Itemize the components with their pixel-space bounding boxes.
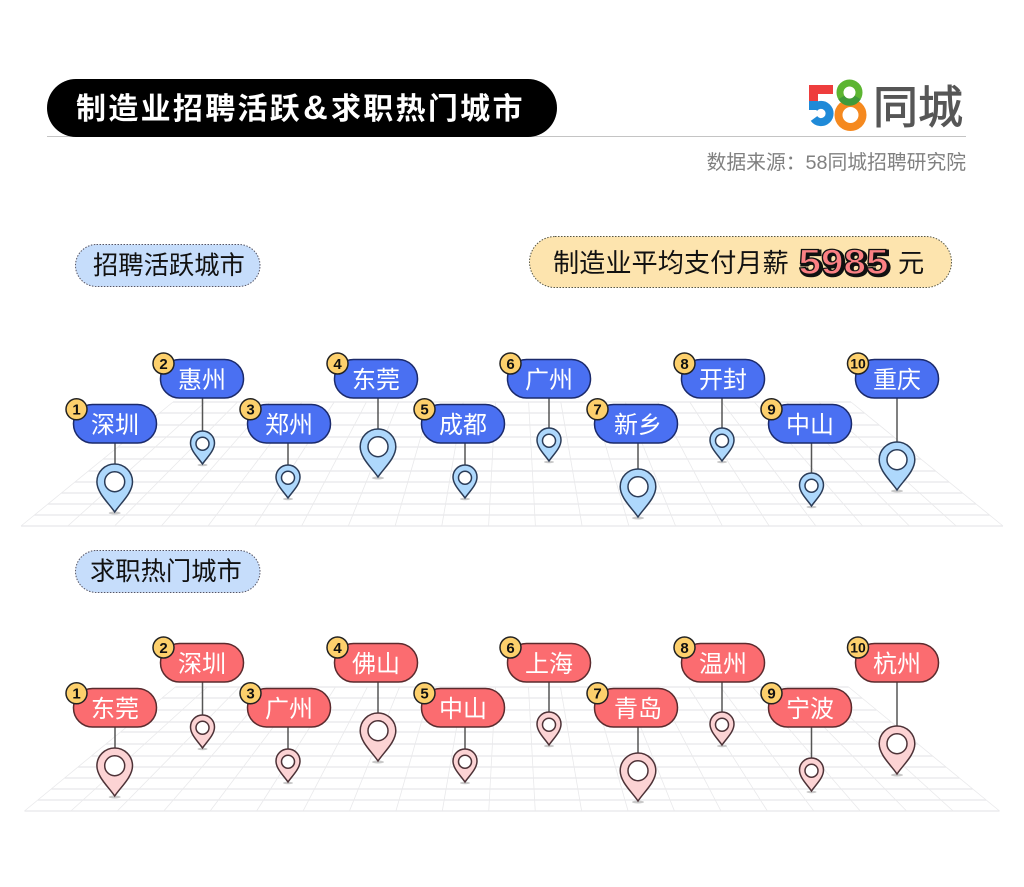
seeker city 10: 杭州: 10 xyxy=(850,640,866,656)
seeker city 10: 杭州 xyxy=(848,637,938,776)
seeker city 6: 上海 xyxy=(500,637,590,747)
title banner xyxy=(47,79,557,137)
hiring city 10: 重庆: 重庆 xyxy=(873,367,921,394)
salary callout: 元 xyxy=(898,248,924,278)
seeker city 9: 宁波: 9 xyxy=(767,686,776,702)
seeker city 2: 深圳 xyxy=(153,637,244,750)
hiring city 3: 郑州: 郑州 xyxy=(265,412,313,439)
seeker city 8: 温州: 温州 xyxy=(699,651,747,678)
hiring city 5: 成都: 5 xyxy=(420,402,429,418)
hiring city 1: 深圳: 1 xyxy=(72,402,81,418)
seeker city 2: 深圳: 深圳 xyxy=(178,651,226,678)
hiring city 4: 东莞 xyxy=(327,353,418,480)
hiring city 10: 重庆: 10 xyxy=(850,356,866,372)
salary callout: 5985 xyxy=(800,244,890,284)
seeker city 9: 宁波: 宁波 xyxy=(786,696,834,723)
job-seeking floor grid xyxy=(24,687,1000,811)
seeker city 6: 上海: 6 xyxy=(506,640,515,657)
salary callout xyxy=(530,236,952,288)
seeker city 3: 广州: 广州 xyxy=(265,696,313,723)
seeker city 3: 广州 xyxy=(240,683,330,784)
seeker city 3: 广州: 3 xyxy=(246,686,255,702)
hiring city 5: 成都: 成都 xyxy=(439,412,487,439)
hiring city 8: 开封 xyxy=(674,353,764,463)
seeker city 5: 中山 xyxy=(414,683,504,784)
seeker city 2: 深圳: 2 xyxy=(159,640,168,657)
section tag: hiring cities: 招聘活跃城市 xyxy=(93,252,245,280)
hiring city 9: 中山 xyxy=(761,399,852,508)
seeker city 1: 东莞 xyxy=(66,683,156,798)
hiring city 7: 新乡: 7 xyxy=(593,402,602,418)
hiring city 4: 东莞: 东莞 xyxy=(352,367,400,394)
seeker city 4: 佛山: 4 xyxy=(333,640,342,657)
hiring city 9: 中山: 中山 xyxy=(786,412,834,439)
hiring city 2: 惠州: 惠州 xyxy=(178,367,226,394)
hiring city 8: 开封: 8 xyxy=(680,356,689,373)
seeker city 4: 佛山: 佛山 xyxy=(352,651,400,678)
hiring city 6: 广州: 6 xyxy=(506,356,515,373)
salary callout: 5985 xyxy=(798,243,888,282)
hiring floor grid xyxy=(21,402,1003,526)
header rule xyxy=(47,136,966,138)
hiring city 7: 新乡: 新乡 xyxy=(614,412,662,439)
seeker city 6: 上海: 上海 xyxy=(525,651,573,678)
seeker city 9: 宁波 xyxy=(761,683,852,793)
hiring city 2: 惠州: 2 xyxy=(159,356,168,373)
seeker city 5: 中山: 5 xyxy=(420,686,429,702)
hiring city 1: 深圳 xyxy=(66,399,156,514)
seeker city 8: 温州: 8 xyxy=(680,640,689,657)
title banner: 制造业招聘活跃&求职热门城市 xyxy=(76,89,525,127)
hiring city 3: 郑州 xyxy=(240,399,330,500)
seeker city 7: 青岛: 7 xyxy=(593,686,602,702)
seeker city 7: 青岛 xyxy=(587,683,678,804)
seeker city 1: 东莞: 东莞 xyxy=(91,696,139,723)
hiring city 7: 新乡 xyxy=(587,399,678,520)
seeker city 4: 佛山 xyxy=(327,637,418,764)
salary callout: 制造业平均支付月薪 xyxy=(553,248,789,278)
logo: 58同城: 同城 xyxy=(873,82,963,133)
data source: 数据来源：58同城招聘研究院 xyxy=(707,152,966,174)
hiring city 8: 开封: 开封 xyxy=(699,367,747,394)
hiring city 6: 广州 xyxy=(500,353,590,463)
hiring city 10: 重庆 xyxy=(848,353,938,492)
section tag: job-seeking cities xyxy=(76,550,260,592)
hiring city 5: 成都 xyxy=(414,399,504,500)
hiring city 6: 广州: 广州 xyxy=(525,367,573,394)
hiring city 3: 郑州: 3 xyxy=(246,402,255,418)
seeker city 8: 温州 xyxy=(674,637,764,747)
section tag: hiring cities xyxy=(76,244,260,286)
section tag: job-seeking cities: 求职热门城市 xyxy=(90,558,242,586)
seeker city 7: 青岛: 青岛 xyxy=(614,696,662,723)
seeker city 1: 东莞: 1 xyxy=(72,686,81,702)
hiring city 9: 中山: 9 xyxy=(767,402,776,418)
seeker city 5: 中山: 中山 xyxy=(439,696,487,723)
hiring city 1: 深圳: 深圳 xyxy=(91,412,139,439)
hiring city 4: 东莞: 4 xyxy=(333,356,342,373)
hiring city 2: 惠州 xyxy=(153,353,244,466)
seeker city 10: 杭州: 杭州 xyxy=(873,651,921,678)
logo: 58同城 xyxy=(814,82,963,133)
